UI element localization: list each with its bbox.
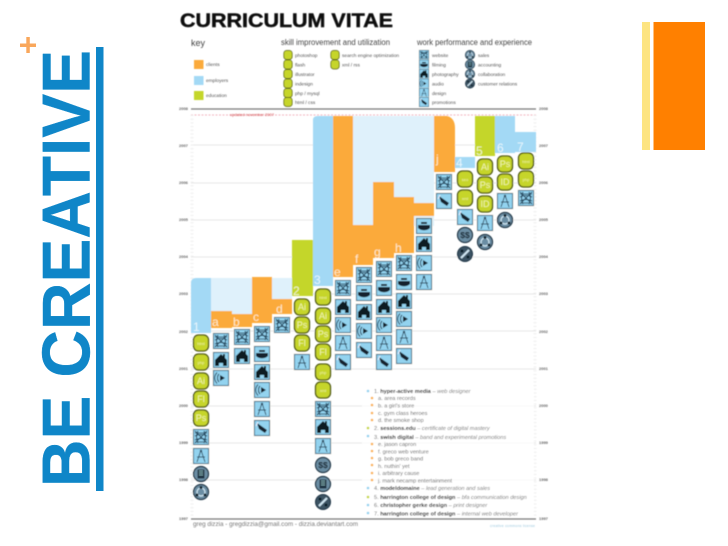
bar labels: c: [253, 310, 259, 324]
bar labels: h: [395, 241, 402, 255]
bar labels: 7: [517, 140, 524, 154]
accent: orange block: [654, 22, 705, 150]
employment history list: h. nuthin' yet: [378, 464, 410, 470]
columns 4 to 7 icons: [456, 153, 534, 262]
bar labels: f: [355, 252, 359, 266]
key: work performance and experience: audio: [432, 82, 444, 88]
timeline grid and year labels: 2006: [179, 180, 189, 185]
columns 4 to 7 icons: Ps: [480, 180, 491, 190]
timeline grid and year labels: 1998: [179, 477, 189, 482]
employment history list: e. jason capron: [378, 442, 416, 448]
column 2 icons: Fl: [298, 338, 306, 348]
bar labels: 6: [497, 141, 504, 155]
employment history list: g. bob greco band: [378, 456, 423, 462]
rotated heading: BE CREATIVE: BE CREATIVE: [30, 50, 104, 487]
key: work performance and experience: collaboration: [478, 72, 506, 78]
employment history list: a. area records: [378, 396, 416, 402]
column 1 icons: Ps: [196, 413, 207, 423]
key: work performance and experience: promotions: [432, 100, 456, 106]
column 3 icons: xml: [320, 388, 326, 393]
key: colour legend: [191, 38, 229, 100]
columns 4 to 7 icons: ID: [480, 199, 490, 209]
timeline grid and year labels: 2008: [539, 106, 549, 111]
column 3 icons: Ps: [318, 329, 329, 339]
key: work performance and experience: design: [432, 91, 446, 97]
timeline grid and year labels: 1997: [539, 516, 549, 521]
key: colour legend: employers: [206, 78, 229, 84]
key: work performance and experience: website: [432, 53, 449, 59]
title: CURRICULUM VITAE: [180, 10, 393, 32]
timeline grid and year labels: 1998: [539, 477, 549, 482]
key: skill improvement and utilization: illustrator: [295, 72, 315, 78]
columns 4 to 7 icons: html: [522, 159, 530, 164]
columns a to d icons: [212, 316, 290, 436]
employment history list: 7. harrington college of design – internal web developer: [374, 512, 519, 518]
bar labels: b: [233, 315, 240, 329]
employment history list: c. gym class heroes: [378, 411, 428, 417]
column 3 icons: [314, 289, 332, 510]
timeline grid and year labels: 2001: [179, 366, 189, 371]
timeline grid and year labels: 2004: [539, 254, 549, 259]
key: work performance and experience: customer relations: [478, 82, 518, 88]
employment history list: 4. modeldomaine – lead generation and sales: [374, 486, 490, 492]
key: colour legend: key: [191, 38, 206, 48]
column 2 icons: [294, 299, 310, 370]
key: skill improvement and utilization: html / css: [295, 100, 316, 106]
column 1 icons: Fl: [197, 394, 205, 404]
timeline grid and year labels: 1997: [179, 516, 189, 521]
accent: yellow bar: [642, 22, 650, 150]
columns 4 to 7 icons: xml: [462, 196, 468, 201]
timeline grid and year labels: 2004: [179, 254, 189, 259]
column 1 icons: php: [198, 360, 205, 365]
bar labels: 1: [193, 320, 200, 334]
column 3 icons: Ai: [319, 311, 327, 321]
employment history list: d. the smoke shop: [378, 418, 424, 424]
key: work performance and experience: photography: [432, 72, 459, 78]
key: work performance and experience: filming: [432, 62, 446, 68]
key: colour legend: education: [206, 93, 227, 99]
timeline grid and year labels: 2002: [539, 329, 549, 334]
column 1 icons: [192, 335, 210, 500]
timeline grid and year labels: 2003: [179, 291, 189, 296]
timeline grid and year labels: 2008: [179, 106, 189, 111]
columns 4 to 7 icons: seo: [462, 177, 469, 182]
key: skill improvement and utilization: flash: [295, 62, 305, 68]
employment history list: 3. swish digital – band and experimental promotions: [374, 435, 506, 441]
employment history list: i. arbitrary cause: [378, 471, 419, 477]
timeline grid and year labels: 2001: [539, 366, 549, 371]
timeline bars: [191, 116, 536, 333]
footer license note: creative commons license: [490, 524, 535, 528]
bar labels: j: [435, 152, 439, 166]
footer contact line: greg dizzia - gregdizzia@gmail.com - dizzia.deviantart.com: [193, 521, 358, 528]
key: skill improvement and utilization: skill improvement and utilization: [281, 38, 390, 47]
timeline grid and year labels: 1999: [179, 440, 189, 445]
accent: orange plus: [20, 37, 36, 53]
employment history list: 2. sessions.edu – certificate of digital mastery: [374, 426, 491, 432]
column 3 icons: Fl: [319, 347, 327, 357]
bar labels: 4: [456, 156, 463, 170]
bar labels: [193, 140, 524, 334]
heading underline: [96, 47, 104, 491]
timeline grid and year labels: 1999: [539, 440, 549, 445]
bar labels: 2: [293, 284, 300, 298]
key: colour legend: clients: [206, 62, 220, 68]
curriculum vitae infographic: [179, 10, 549, 528]
bar labels: g: [374, 245, 381, 259]
bar labels: d: [276, 302, 283, 316]
timeline grid and year labels: updated november 2007: [230, 112, 275, 117]
bar labels: 3: [314, 273, 321, 287]
timeline grid and year labels: 2000: [539, 403, 549, 408]
key: work performance and experience: accounting: [478, 62, 502, 68]
employment history list: [362, 386, 534, 518]
bar labels: e: [334, 265, 341, 279]
timeline grid and year labels: [179, 106, 549, 521]
column 1 icons: html: [197, 341, 205, 346]
key: skill improvement and utilization: photoshop: [295, 53, 318, 59]
key: work performance and experience: [416, 38, 532, 107]
column 1 icons: Ai: [197, 376, 205, 386]
column 3 icons: html: [319, 295, 327, 300]
column 2 icons: Ai: [298, 302, 306, 312]
timeline grid and year labels: 2000: [179, 403, 189, 408]
key: skill improvement and utilization: xml / rss: [342, 62, 360, 68]
employment history list: 1. hyper-active media – web designer: [374, 389, 472, 395]
employment history list: 5. harrington college of design – bfa communication design: [374, 495, 527, 501]
columns e to j icons: [334, 174, 452, 370]
timeline grid and year labels: 2007: [539, 143, 549, 148]
employment history list: j. mark necamp entertainment: [377, 478, 452, 484]
key: work performance and experience: sales: [478, 53, 490, 59]
bar labels: 5: [476, 144, 483, 158]
bar labels: a: [212, 315, 219, 329]
key: skill improvement and utilization: [281, 38, 399, 106]
employment history list: b. a girl's store: [378, 404, 414, 410]
columns 4 to 7 icons: Ai: [481, 162, 489, 172]
column 2 icons: Ps: [297, 320, 308, 330]
columns 4 to 7 icons: php: [523, 177, 530, 182]
timeline grid and year labels: 2007: [179, 143, 189, 148]
employment history list: 6. christopher gerke design – print designer: [374, 503, 488, 509]
timeline grid and year labels: 2003: [539, 291, 549, 296]
timeline grid and year labels: 2002: [179, 329, 189, 334]
timeline grid and year labels: 2006: [539, 180, 549, 185]
employment history list: f. greco web venture: [378, 450, 429, 456]
columns 4 to 7 icons: Ps: [500, 159, 511, 169]
timeline grid and year labels: 2005: [179, 217, 189, 222]
column 3 icons: php: [320, 370, 327, 375]
key: skill improvement and utilization: search engine optimization: [342, 53, 399, 59]
timeline grid and year labels: 2005: [539, 217, 549, 222]
columns 4 to 7 icons: ID: [500, 177, 510, 187]
key: skill improvement and utilization: php / mysql: [295, 91, 320, 97]
key: skill improvement and utilization: indesign: [295, 82, 313, 88]
key: work performance and experience: work performance and experience: [416, 38, 532, 47]
